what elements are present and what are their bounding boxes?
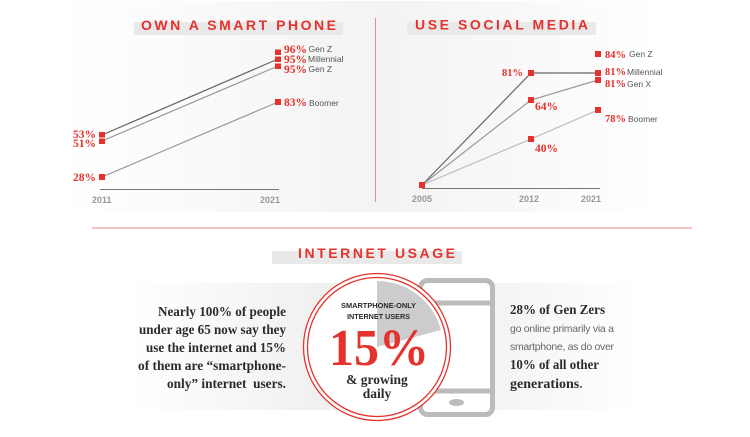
panel: left text background — [130, 283, 345, 410]
heading: own a smart phone: OWN A SMART PHONE — [141, 17, 336, 33]
text block: right paragraph: 28% of Gen Zers — [510, 303, 606, 318]
line chart: social media use: 2005 — [412, 194, 432, 204]
text block: left paragraph: Nearly 100% of people — [158, 305, 286, 320]
line chart: smart phone ownership: 53% — [73, 129, 96, 141]
heading: use social media: USE SOCIAL MEDIA — [415, 16, 588, 32]
callout: 15% circle: INTERNET USERS — [347, 312, 410, 321]
text block: left paragraph: under age 65 now say they — [139, 323, 286, 338]
panel: top background — [60, 1, 660, 212]
line chart: social media use: 2021 — [581, 194, 601, 204]
panel: right text background — [490, 283, 640, 410]
text block: right paragraph: generations. — [510, 377, 583, 392]
text block: right paragraph: smartphone, as do over — [510, 341, 614, 353]
divider: horizontal — [92, 227, 692, 229]
text block: left paragraph: use the internet and 15% — [146, 341, 286, 356]
divider: vertical — [374, 18, 376, 202]
text block: right paragraph: go online primarily via a — [510, 323, 614, 335]
line chart: smart phone ownership: 83% — [284, 97, 307, 109]
line chart: social media use: 2012 — [519, 194, 539, 204]
line chart: social media use: Gen X — [627, 79, 651, 89]
line chart: smart phone ownership: Gen Z — [308, 64, 332, 74]
line chart: smart phone ownership: 2021 — [260, 195, 280, 205]
line chart: smart phone ownership: 95% — [284, 54, 307, 66]
heading: internet usage — [272, 245, 462, 264]
heading: internet usage: INTERNET USAGE — [298, 245, 455, 261]
line chart: social media use: Millennial — [627, 67, 663, 77]
icon: smartphone — [420, 280, 493, 414]
line chart: smart phone ownership: 28% — [73, 172, 96, 184]
callout: 15% circle — [304, 274, 450, 420]
pie wedge — [377, 281, 441, 347]
line chart: social media use: Boomer — [628, 114, 658, 124]
line chart: social media use: Gen Z — [629, 49, 653, 59]
callout: 15% circle: SMARTPHONE-ONLY — [341, 301, 416, 310]
line chart: smart phone ownership: 96% — [284, 44, 307, 56]
line chart: social media use — [412, 49, 663, 204]
callout: 15% circle: daily — [363, 386, 392, 401]
text block: left paragraph: only” internet users. — [167, 377, 286, 392]
text block: left paragraph — [138, 305, 286, 392]
text block: right paragraph — [510, 303, 614, 392]
text block: left paragraph: of them are “smartphone- — [138, 359, 286, 374]
line chart: social media use: 81% — [605, 67, 626, 78]
text block: right paragraph: 10% of all other — [510, 358, 599, 373]
line chart: smart phone ownership: Millennial — [308, 54, 344, 64]
panel: use social media — [407, 16, 663, 204]
line chart: smart phone ownership: Gen Z — [308, 44, 332, 54]
line chart: smart phone ownership: 2011 — [92, 195, 112, 205]
line chart: social media use: 64% — [535, 101, 558, 113]
line chart: smart phone ownership — [73, 44, 344, 205]
line chart: social media use: 84% — [605, 50, 626, 61]
line chart: smart phone ownership: Boomer — [309, 98, 339, 108]
panel: own a smart phone — [73, 17, 344, 205]
line chart: social media use: 81% — [605, 79, 626, 90]
callout: 15% circle: & growing — [346, 372, 408, 387]
line chart: social media use: 40% — [535, 143, 558, 155]
callout: 15% circle: 15% — [329, 320, 429, 377]
line chart: social media use: 81% — [502, 68, 523, 79]
line chart: social media use: 78% — [605, 114, 626, 125]
line chart: smart phone ownership: 51% — [73, 138, 96, 150]
line chart: smart phone ownership: 95% — [284, 64, 307, 76]
